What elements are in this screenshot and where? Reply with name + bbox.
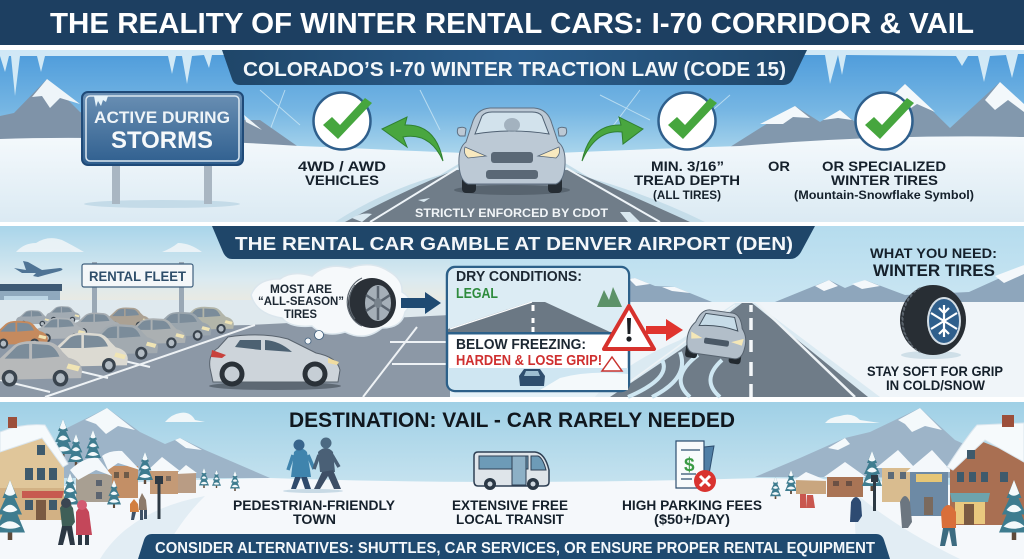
icon: parking receipt (676, 441, 716, 492)
title banner (0, 0, 1024, 45)
header band (222, 50, 807, 85)
icicles (0, 50, 1024, 96)
label: parking fees: HIGH PARKING FEES (622, 498, 762, 513)
house beige (876, 450, 915, 502)
thought cloud: MOST ARE (270, 284, 332, 296)
label: winter tires (794, 158, 974, 202)
label: tread depth: MIN. 3/16” (651, 158, 724, 174)
house small (147, 457, 180, 494)
icon: pedestrians (283, 438, 343, 493)
label: pedestrians: TOWN (293, 512, 336, 527)
label: transit (452, 498, 568, 527)
label: transit: LOCAL TRANSIT (456, 512, 565, 527)
snow field (0, 136, 1024, 222)
parking lot (0, 315, 450, 397)
dry conditions: LEGAL (456, 286, 498, 302)
rental fleet sign (82, 262, 193, 317)
rental car fleet (0, 306, 234, 387)
house tan (794, 472, 828, 494)
house large brick (947, 415, 1024, 525)
thought cloud: “ALL-SEASON” (258, 296, 344, 308)
check: tread (658, 92, 717, 150)
below freezing: HARDEN & LOSE GRIP! (456, 353, 602, 369)
label: pedestrians (233, 498, 395, 527)
airplane (14, 261, 62, 277)
far mountains and snow (629, 265, 1024, 302)
mountains right (730, 82, 1024, 150)
label: winter tires: OR SPECIALIZED (822, 158, 946, 174)
bottom banner: CONSIDER ALTERNATIVES: SHUTTLES, CAR SERVICES, OR ENSURE PROPER RENTAL EQUIPMENT (155, 540, 875, 557)
warning triangle (604, 306, 654, 349)
info box (447, 267, 629, 391)
suv (209, 335, 341, 390)
check: 4WD (314, 92, 372, 150)
label: 4WD: VEHICLES (305, 172, 379, 188)
sliding car (685, 307, 749, 365)
label: transit: EXTENSIVE FREE (452, 498, 568, 513)
people left (58, 493, 147, 545)
left village (0, 417, 240, 545)
road sign: ACTIVE DURING (94, 108, 230, 127)
winter tire callout: IN COLD/SNOW (886, 377, 986, 393)
check: winter tires (856, 92, 914, 150)
road with ice (595, 303, 880, 397)
house brown (102, 451, 140, 498)
thought cloud (251, 265, 410, 344)
road sign (82, 92, 243, 208)
icon: winter tire (900, 285, 966, 359)
house gray (70, 458, 112, 502)
arrow: red (646, 319, 683, 341)
winter tire callout: STAY SOFT FOR GRIP (867, 363, 1003, 379)
label: parking fees (622, 498, 762, 527)
winter tire callout: WHAT YOU NEED: (870, 245, 997, 261)
label: tread depth (634, 158, 740, 202)
heading: DESTINATION: VAIL - CAR RARELY NEEDED (289, 409, 735, 432)
panel: traction law (0, 50, 1024, 222)
below freezing (448, 337, 628, 390)
label: winter tires: WINTER TIRES (831, 172, 938, 188)
label: 4WD (298, 158, 386, 188)
section heading: COLORADO’S I-70 WINTER TRACTION LAW (CODE 15) (243, 59, 786, 81)
terminal building (0, 284, 62, 318)
enforcement note: STRICTLY ENFORCED BY CDOT (415, 206, 609, 220)
winter tire callout: WINTER TIRES (873, 261, 995, 280)
house blue (906, 450, 952, 516)
bottom banner (138, 534, 890, 559)
icon: parking receipt: $ (684, 455, 695, 476)
clouds (16, 238, 202, 252)
icon: sliding car (519, 369, 545, 386)
label: tread depth: TREAD DEPTH (634, 172, 740, 188)
mountains left (0, 79, 300, 148)
house large (0, 417, 68, 520)
label: winter tires: (Mountain-Snowflake Symbol) (794, 190, 974, 202)
lamp post (155, 476, 163, 519)
car: front view (454, 108, 570, 195)
label: 4WD: 4WD / AWD (298, 158, 386, 174)
arrow: green left (382, 117, 443, 161)
mountains (63, 408, 1000, 478)
icon: bus (474, 452, 549, 490)
thought cloud: TIRES (284, 309, 317, 321)
path (100, 496, 960, 559)
label: parking fees: ($50+/DAY) (654, 512, 730, 527)
arrow: green right (582, 117, 643, 161)
section header: THE RENTAL CAR GAMBLE AT DENVER AIRPORT (DEN) (235, 233, 793, 254)
house brown (824, 462, 866, 497)
title: THE REALITY OF WINTER RENTAL CARS: I-70 CORRIDOR & VAIL (50, 8, 974, 40)
clouds (165, 413, 880, 423)
dry conditions (448, 268, 628, 332)
icon: all-season tire (347, 278, 396, 328)
right village (770, 415, 1024, 546)
distant trees (53, 419, 240, 491)
label: or: OR (768, 158, 790, 174)
house far (176, 465, 197, 493)
panel: destination vail (0, 402, 1024, 559)
people right (800, 494, 957, 546)
winter tire callout (867, 245, 1003, 393)
road sign: STORMS (111, 127, 213, 154)
panel: rental gamble (0, 226, 1024, 397)
label: pedestrians: PEDESTRIAN-FRIENDLY (233, 498, 395, 513)
arrow: navy (401, 292, 441, 314)
lamp post (871, 475, 878, 511)
section header (212, 226, 815, 259)
below freezing: BELOW FREEZING: (456, 337, 586, 353)
dry conditions: DRY CONDITIONS: (456, 269, 582, 285)
road (335, 160, 705, 222)
icon: small warning (602, 357, 622, 371)
label: tread depth: (ALL TIRES) (653, 190, 721, 202)
snow ground (0, 478, 1024, 559)
rental fleet sign: RENTAL FLEET (89, 269, 187, 284)
